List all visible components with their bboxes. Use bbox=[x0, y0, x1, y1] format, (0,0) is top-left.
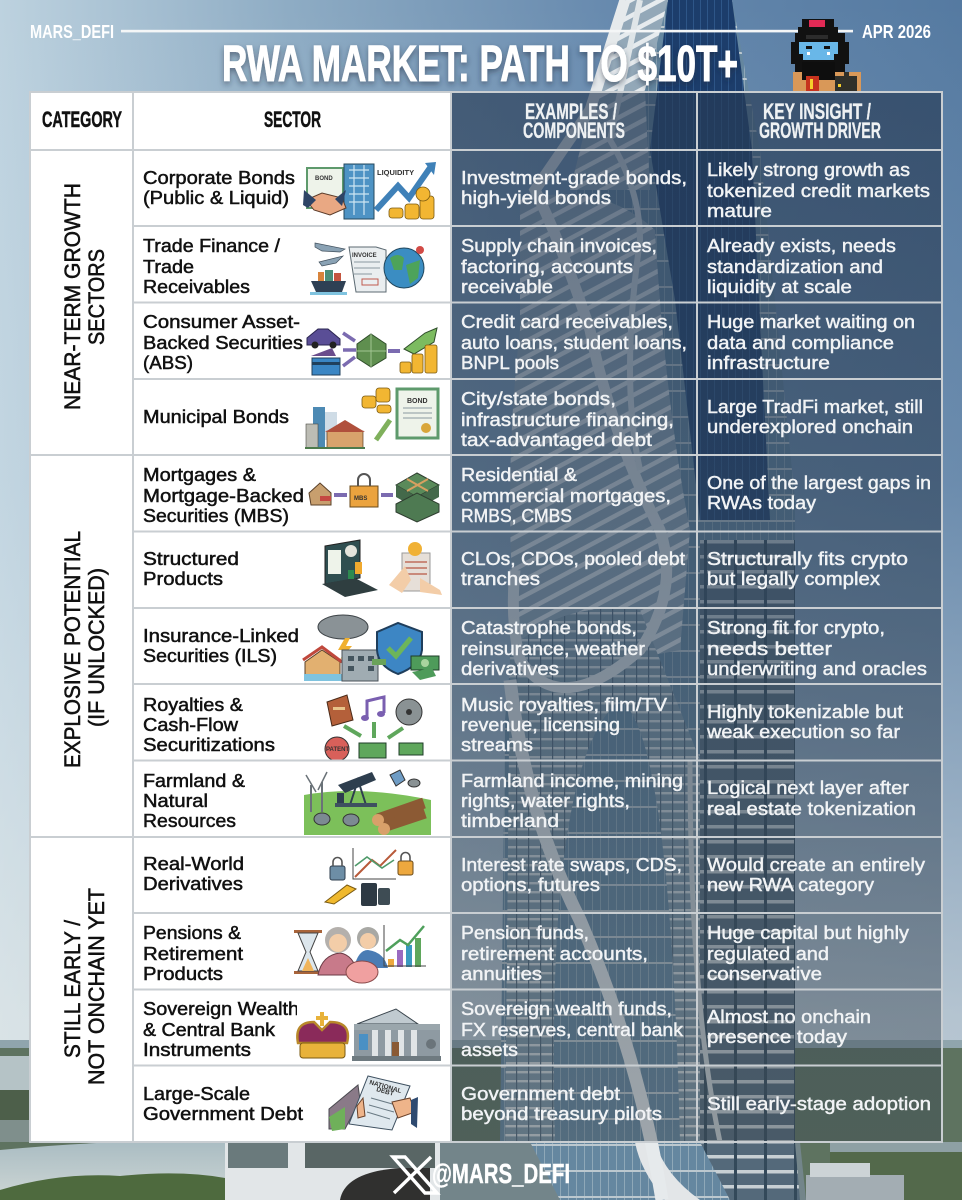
insight: municipal bonds: Large TradFi market, still bbox=[707, 397, 923, 417]
sector: government debt bbox=[143, 1084, 303, 1124]
examples: farmland: Farmland income, mining bbox=[461, 771, 683, 791]
examples: pensions bbox=[461, 923, 648, 984]
header: date: APR 2026 bbox=[862, 22, 931, 42]
insight: structured products: but legally complex bbox=[707, 569, 880, 589]
insight: trade finance: liquidity at scale bbox=[707, 277, 852, 297]
sector: mortgages: Mortgages & bbox=[143, 465, 256, 485]
insight: government debt: Still early-stage adoption bbox=[707, 1094, 931, 1114]
examples column text bbox=[461, 168, 687, 1124]
category: explosive potential: EXPLOSIVE POTENTIAL bbox=[60, 531, 85, 768]
insight: farmland: real estate tokenization bbox=[707, 799, 916, 819]
examples: royalties bbox=[461, 695, 667, 755]
examples: consumer ABS bbox=[461, 312, 687, 373]
category: still early: STILL EARLY / bbox=[60, 919, 85, 1058]
insight: trade finance: standardization and bbox=[707, 257, 883, 277]
sector: royalties: Securitizations bbox=[143, 735, 275, 755]
sector: farmland: Natural bbox=[143, 791, 208, 811]
sector: royalties: Royalties & bbox=[143, 695, 243, 715]
category: still early: NOT ONCHAIN YET bbox=[84, 888, 109, 1085]
table header row bbox=[42, 99, 881, 143]
insight: mortgages: RWAs today bbox=[707, 493, 816, 513]
sector: consumer ABS: (ABS) bbox=[143, 353, 193, 373]
panel: white columns bbox=[30, 92, 451, 1142]
examples: municipal bonds: tax-advantaged debt bbox=[461, 430, 652, 450]
insight: municipal bonds: underexplored onchain bbox=[707, 417, 913, 437]
icon: insurance-linked bbox=[303, 615, 439, 681]
insight: royalties bbox=[706, 702, 903, 742]
header: brand name: MARS_DEFI bbox=[30, 22, 114, 42]
examples: corporate bonds: Investment-grade bonds, bbox=[461, 168, 687, 188]
examples: trade finance: Supply chain invoices, bbox=[461, 236, 657, 256]
sector: consumer ABS: Backed Securities bbox=[143, 333, 303, 353]
icon: farmland and natural resources bbox=[304, 770, 431, 835]
heading: key insight / growth driver: GROWTH DRIVER bbox=[759, 118, 881, 143]
sector: structured products: Structured bbox=[143, 549, 239, 569]
examples: municipal bonds: infrastructure financing, bbox=[461, 410, 674, 430]
examples: corporate bonds bbox=[461, 168, 687, 208]
heading: examples / components bbox=[523, 99, 625, 143]
sector: insurance-linked securities: Securities (ILS) bbox=[143, 646, 277, 666]
sector: sovereign wealth bbox=[143, 999, 299, 1060]
sector: farmland: Resources bbox=[143, 811, 236, 831]
examples: consumer ABS: auto loans, student loans, bbox=[461, 333, 687, 353]
sector: insurance-linked securities bbox=[143, 626, 299, 666]
insight: farmland bbox=[707, 778, 916, 819]
insight: consumer ABS: infrastructure bbox=[707, 353, 830, 373]
insight: consumer ABS: data and compliance bbox=[707, 333, 894, 353]
sector: structured products bbox=[143, 549, 239, 589]
sector: mortgages bbox=[143, 465, 304, 526]
examples: structured products: CLOs, CDOs, pooled debt bbox=[461, 549, 685, 569]
examples: municipal bonds: City/state bonds, bbox=[461, 389, 616, 409]
icon: municipal bonds: BOND bbox=[407, 398, 428, 405]
examples: derivatives bbox=[461, 855, 682, 895]
insight: trade finance: Already exists, needs bbox=[707, 236, 896, 256]
insight: derivatives: Would create an entirely bbox=[707, 855, 925, 875]
insight: pensions: conservative bbox=[707, 964, 822, 984]
sector: consumer ABS bbox=[143, 312, 303, 373]
icon: sovereign wealth crown and bank bbox=[297, 1009, 441, 1061]
sector: farmland bbox=[143, 771, 245, 831]
insight: royalties: Highly tokenizable but bbox=[707, 702, 903, 722]
sector: pensions bbox=[143, 923, 243, 984]
examples: government debt: beyond treasury pilots bbox=[461, 1104, 662, 1124]
sector: pensions: Pensions & bbox=[143, 923, 241, 943]
insight: structured products: Structurally fits crypto bbox=[707, 549, 908, 569]
examples: insurance-linked: reinsurance, weather bbox=[461, 639, 645, 659]
insight: corporate bonds: mature bbox=[707, 201, 772, 221]
examples: insurance-linked: derivatives bbox=[461, 659, 559, 679]
sector: real-world derivatives: Derivatives bbox=[143, 874, 243, 894]
sector: sovereign wealth: Sovereign Wealth bbox=[143, 999, 299, 1019]
examples: farmland: timberland bbox=[461, 811, 559, 831]
sector: mortgages: Securities (MBS) bbox=[143, 506, 289, 526]
insight: farmland: Logical next layer after bbox=[707, 778, 909, 798]
insight: mortgages: One of the largest gaps in bbox=[707, 473, 931, 493]
examples: derivatives: Interest rate swaps, CDS, bbox=[461, 855, 682, 875]
icon: royalties bbox=[325, 695, 423, 761]
sector: pensions: Products bbox=[143, 964, 223, 984]
header rule line bbox=[121, 30, 853, 32]
examples: government debt bbox=[461, 1084, 662, 1124]
insight: structured products bbox=[707, 549, 908, 589]
examples: pensions: annuities bbox=[461, 964, 542, 984]
insight: sovereign wealth bbox=[707, 1007, 871, 1047]
icon: corporate bonds: LIQUIDITY bbox=[377, 168, 414, 177]
examples: trade finance: factoring, accounts bbox=[461, 257, 633, 277]
sector: mortgages: Mortgage-Backed bbox=[143, 486, 304, 506]
examples: sovereign wealth: assets bbox=[461, 1040, 518, 1060]
insight: sovereign wealth: presence today bbox=[707, 1027, 847, 1047]
insight: insurance-linked: needs better bbox=[707, 639, 832, 659]
icon: structured products bbox=[322, 540, 442, 597]
examples: government debt: Government debt bbox=[461, 1084, 620, 1104]
key insight column text bbox=[706, 160, 931, 1114]
sector: sovereign wealth: & Central Bank bbox=[143, 1020, 276, 1040]
examples: royalties: revenue, licensing bbox=[461, 715, 620, 735]
examples: derivatives: options, futures bbox=[461, 875, 600, 895]
insight: insurance-linked bbox=[707, 618, 927, 679]
icon: government debt bbox=[329, 1076, 418, 1131]
icon: corporate bonds: BOND bbox=[315, 176, 333, 182]
sector: farmland: Farmland & bbox=[143, 771, 245, 791]
icon: real-world derivatives bbox=[325, 848, 413, 906]
insight: corporate bonds: tokenized credit markets bbox=[707, 181, 930, 201]
insight: derivatives: new RWA category bbox=[707, 875, 874, 895]
insight: corporate bonds bbox=[707, 160, 930, 221]
panel: dark translucent columns bbox=[451, 92, 942, 1142]
examples: sovereign wealth bbox=[461, 999, 684, 1060]
examples: insurance-linked bbox=[461, 618, 645, 679]
insight: pensions: Huge capital but highly bbox=[707, 923, 909, 943]
icon: pensions bbox=[294, 925, 426, 983]
sector names bbox=[143, 168, 304, 1124]
heading: key insight / growth driver: KEY INSIGHT / bbox=[763, 99, 871, 124]
category: near-term growth sectors bbox=[60, 183, 109, 410]
examples: municipal bonds bbox=[461, 389, 674, 450]
sector: sovereign wealth: Instruments bbox=[143, 1040, 251, 1060]
insight: pensions bbox=[707, 923, 909, 984]
icon: consumer ABS bbox=[307, 328, 437, 375]
examples: trade finance: receivable bbox=[461, 277, 553, 297]
examples: sovereign wealth: FX reserves, central bank bbox=[461, 1020, 684, 1040]
icon: mortgages bbox=[309, 473, 439, 522]
icon: mortgages: MBS bbox=[354, 496, 367, 502]
white patch clipping sovereign heading bbox=[297, 998, 347, 1020]
insight: mortgages bbox=[707, 473, 931, 513]
category: near-term growth sectors: NEAR-TERM GROWTH bbox=[60, 183, 85, 410]
examples: pensions: Pension funds, bbox=[461, 923, 589, 943]
icon: trade finance: INVOICE bbox=[352, 253, 377, 259]
sector: trade finance: Receivables bbox=[143, 277, 250, 297]
insight: corporate bonds: Likely strong growth as bbox=[707, 160, 910, 180]
examples: mortgages: RMBS, CMBS bbox=[461, 506, 572, 526]
sector: corporate bonds: Corporate Bonds bbox=[143, 168, 295, 188]
examples: consumer ABS: Credit card receivables, bbox=[461, 312, 673, 332]
sector: corporate bonds bbox=[143, 168, 295, 208]
examples: insurance-linked: Catastrophe bonds, bbox=[461, 618, 637, 638]
examples: structured products bbox=[461, 549, 685, 589]
sector: insurance-linked securities: Insurance-Linked bbox=[143, 626, 299, 646]
sector: royalties: Cash-Flow bbox=[143, 715, 239, 735]
heading: sector: SECTOR bbox=[264, 107, 321, 132]
heading: category: CATEGORY bbox=[42, 107, 122, 132]
insight: sovereign wealth: Almost no onchain bbox=[707, 1007, 871, 1027]
sector: consumer ABS: Consumer Asset- bbox=[143, 312, 300, 332]
heading: examples / components: EXAMPLES / bbox=[525, 99, 617, 124]
examples: farmland bbox=[461, 771, 683, 831]
category: near-term growth sectors: SECTORS bbox=[84, 249, 109, 345]
examples: structured products: tranches bbox=[461, 569, 540, 589]
icon: government debt: DEBT bbox=[375, 1086, 394, 1098]
sector: pensions: Retirement bbox=[143, 944, 243, 964]
examples: corporate bonds: high-yield bonds bbox=[461, 188, 611, 208]
insight: pensions: regulated and bbox=[707, 944, 829, 964]
insight: municipal bonds bbox=[707, 397, 923, 437]
icon: corporate bonds bbox=[303, 162, 436, 219]
insight: royalties: weak execution so far bbox=[706, 722, 900, 742]
sector: government debt: Government Debt bbox=[143, 1104, 303, 1124]
examples: farmland: rights, water rights, bbox=[461, 791, 630, 811]
examples: mortgages: commercial mortgages, bbox=[461, 486, 671, 506]
icon: royalties: PATENT bbox=[326, 747, 349, 753]
sector: real-world derivatives bbox=[143, 854, 244, 894]
sector: trade finance: Trade bbox=[143, 257, 194, 277]
title: RWA MARKET: PATH TO $10T+ bbox=[222, 35, 738, 92]
sector: government debt: Large-Scale bbox=[143, 1084, 250, 1104]
icon: trade finance bbox=[310, 243, 424, 295]
insight: consumer ABS bbox=[707, 312, 915, 373]
insight: trade finance bbox=[707, 236, 896, 297]
examples: mortgages bbox=[461, 465, 671, 526]
examples: consumer ABS: BNPL pools bbox=[461, 353, 559, 373]
icon: municipal bonds bbox=[305, 388, 438, 449]
icon: pixel-art avatar bbox=[791, 19, 861, 92]
footer: X handle bbox=[393, 1157, 570, 1193]
examples: sovereign wealth: Sovereign wealth funds, bbox=[461, 999, 672, 1019]
tower upper bbox=[500, 0, 795, 1142]
examples: royalties: streams bbox=[461, 735, 533, 755]
sector: trade finance: Trade Finance / bbox=[143, 236, 280, 256]
examples: mortgages: Residential & bbox=[461, 465, 577, 485]
sector: structured products: Products bbox=[143, 569, 223, 589]
sector: trade finance bbox=[143, 236, 280, 297]
icon: government debt: NATIONAL bbox=[368, 1079, 402, 1095]
examples: royalties: Music royalties, film/TV bbox=[461, 695, 667, 715]
examples: trade finance bbox=[461, 236, 657, 297]
handle text: @MARS_DEFI bbox=[432, 1158, 570, 1189]
category: explosive potential: (IF UNLOCKED) bbox=[84, 568, 109, 727]
sector: corporate bonds: (Public & Liquid) bbox=[143, 188, 289, 208]
insight: insurance-linked: Strong fit for crypto, bbox=[707, 618, 885, 638]
icon: X logo bbox=[393, 1157, 437, 1193]
insight: derivatives bbox=[707, 855, 925, 895]
examples: pensions: retirement accounts, bbox=[461, 944, 648, 964]
sector: real-world derivatives: Real-World bbox=[143, 854, 244, 874]
insight: insurance-linked: underwriting and oracles bbox=[707, 659, 927, 679]
insight: consumer ABS: Huge market waiting on bbox=[707, 312, 915, 332]
sector: royalties bbox=[143, 695, 275, 755]
category: still early bbox=[60, 888, 109, 1085]
sector: municipal bonds: Municipal Bonds bbox=[143, 407, 289, 427]
category: explosive potential bbox=[60, 531, 109, 768]
heading: examples / components: COMPONENTS bbox=[523, 118, 625, 143]
heading: key insight / growth driver bbox=[759, 99, 881, 143]
